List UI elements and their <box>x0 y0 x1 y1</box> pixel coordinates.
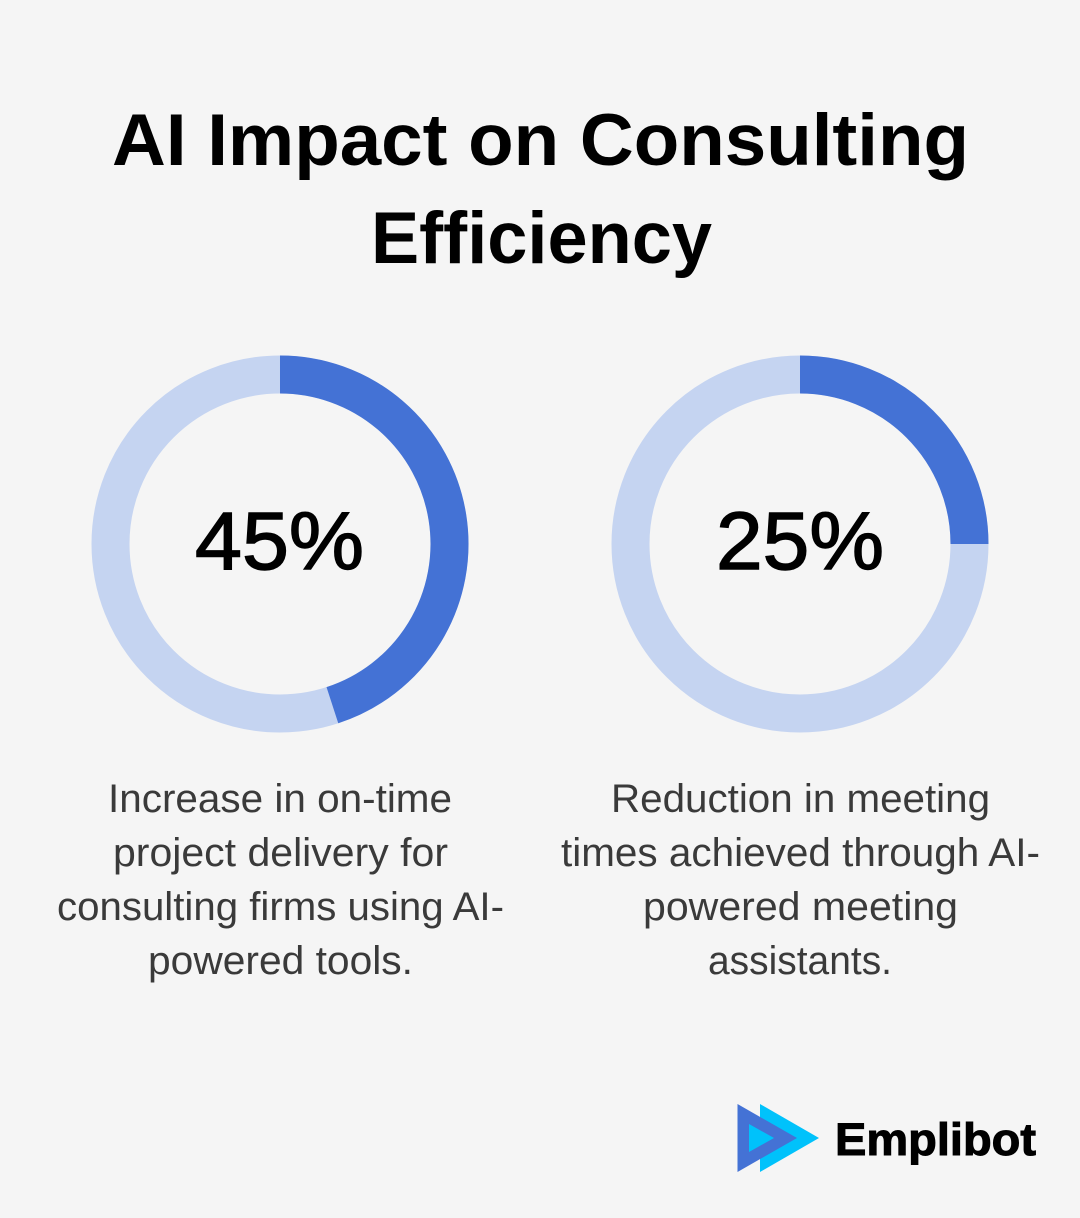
description: on-time delivery: consulting firms using AI- <box>57 885 504 929</box>
description: on-time delivery: powered tools. <box>148 939 413 983</box>
description: on-time delivery: project delivery for <box>113 831 448 875</box>
icon: play triangles <box>738 1104 819 1172</box>
description: meeting times: assistants. <box>708 939 892 983</box>
description: meeting times: powered meeting <box>643 885 958 929</box>
description: on-time delivery <box>57 777 504 983</box>
description: meeting times: times achieved through AI- <box>561 831 1040 875</box>
panel: 45% statistic <box>57 374 504 983</box>
donut chart: 45% <box>110 374 450 714</box>
title: Efficiency <box>371 198 712 279</box>
value: 25%: 25% <box>716 496 884 587</box>
description: meeting times <box>561 777 1040 983</box>
logo: Emplibot <box>738 1104 1036 1172</box>
panel: 25% statistic <box>561 374 1040 983</box>
title: AI Impact on Consulting <box>112 100 969 181</box>
description: on-time delivery: Increase in on-time <box>108 777 452 821</box>
donut chart: 25% <box>630 374 970 714</box>
value: 45%: 45% <box>195 496 364 587</box>
title <box>112 100 969 279</box>
description: meeting times: Reduction in meeting <box>611 777 990 821</box>
wordmark: Emplibot <box>835 1114 1036 1165</box>
